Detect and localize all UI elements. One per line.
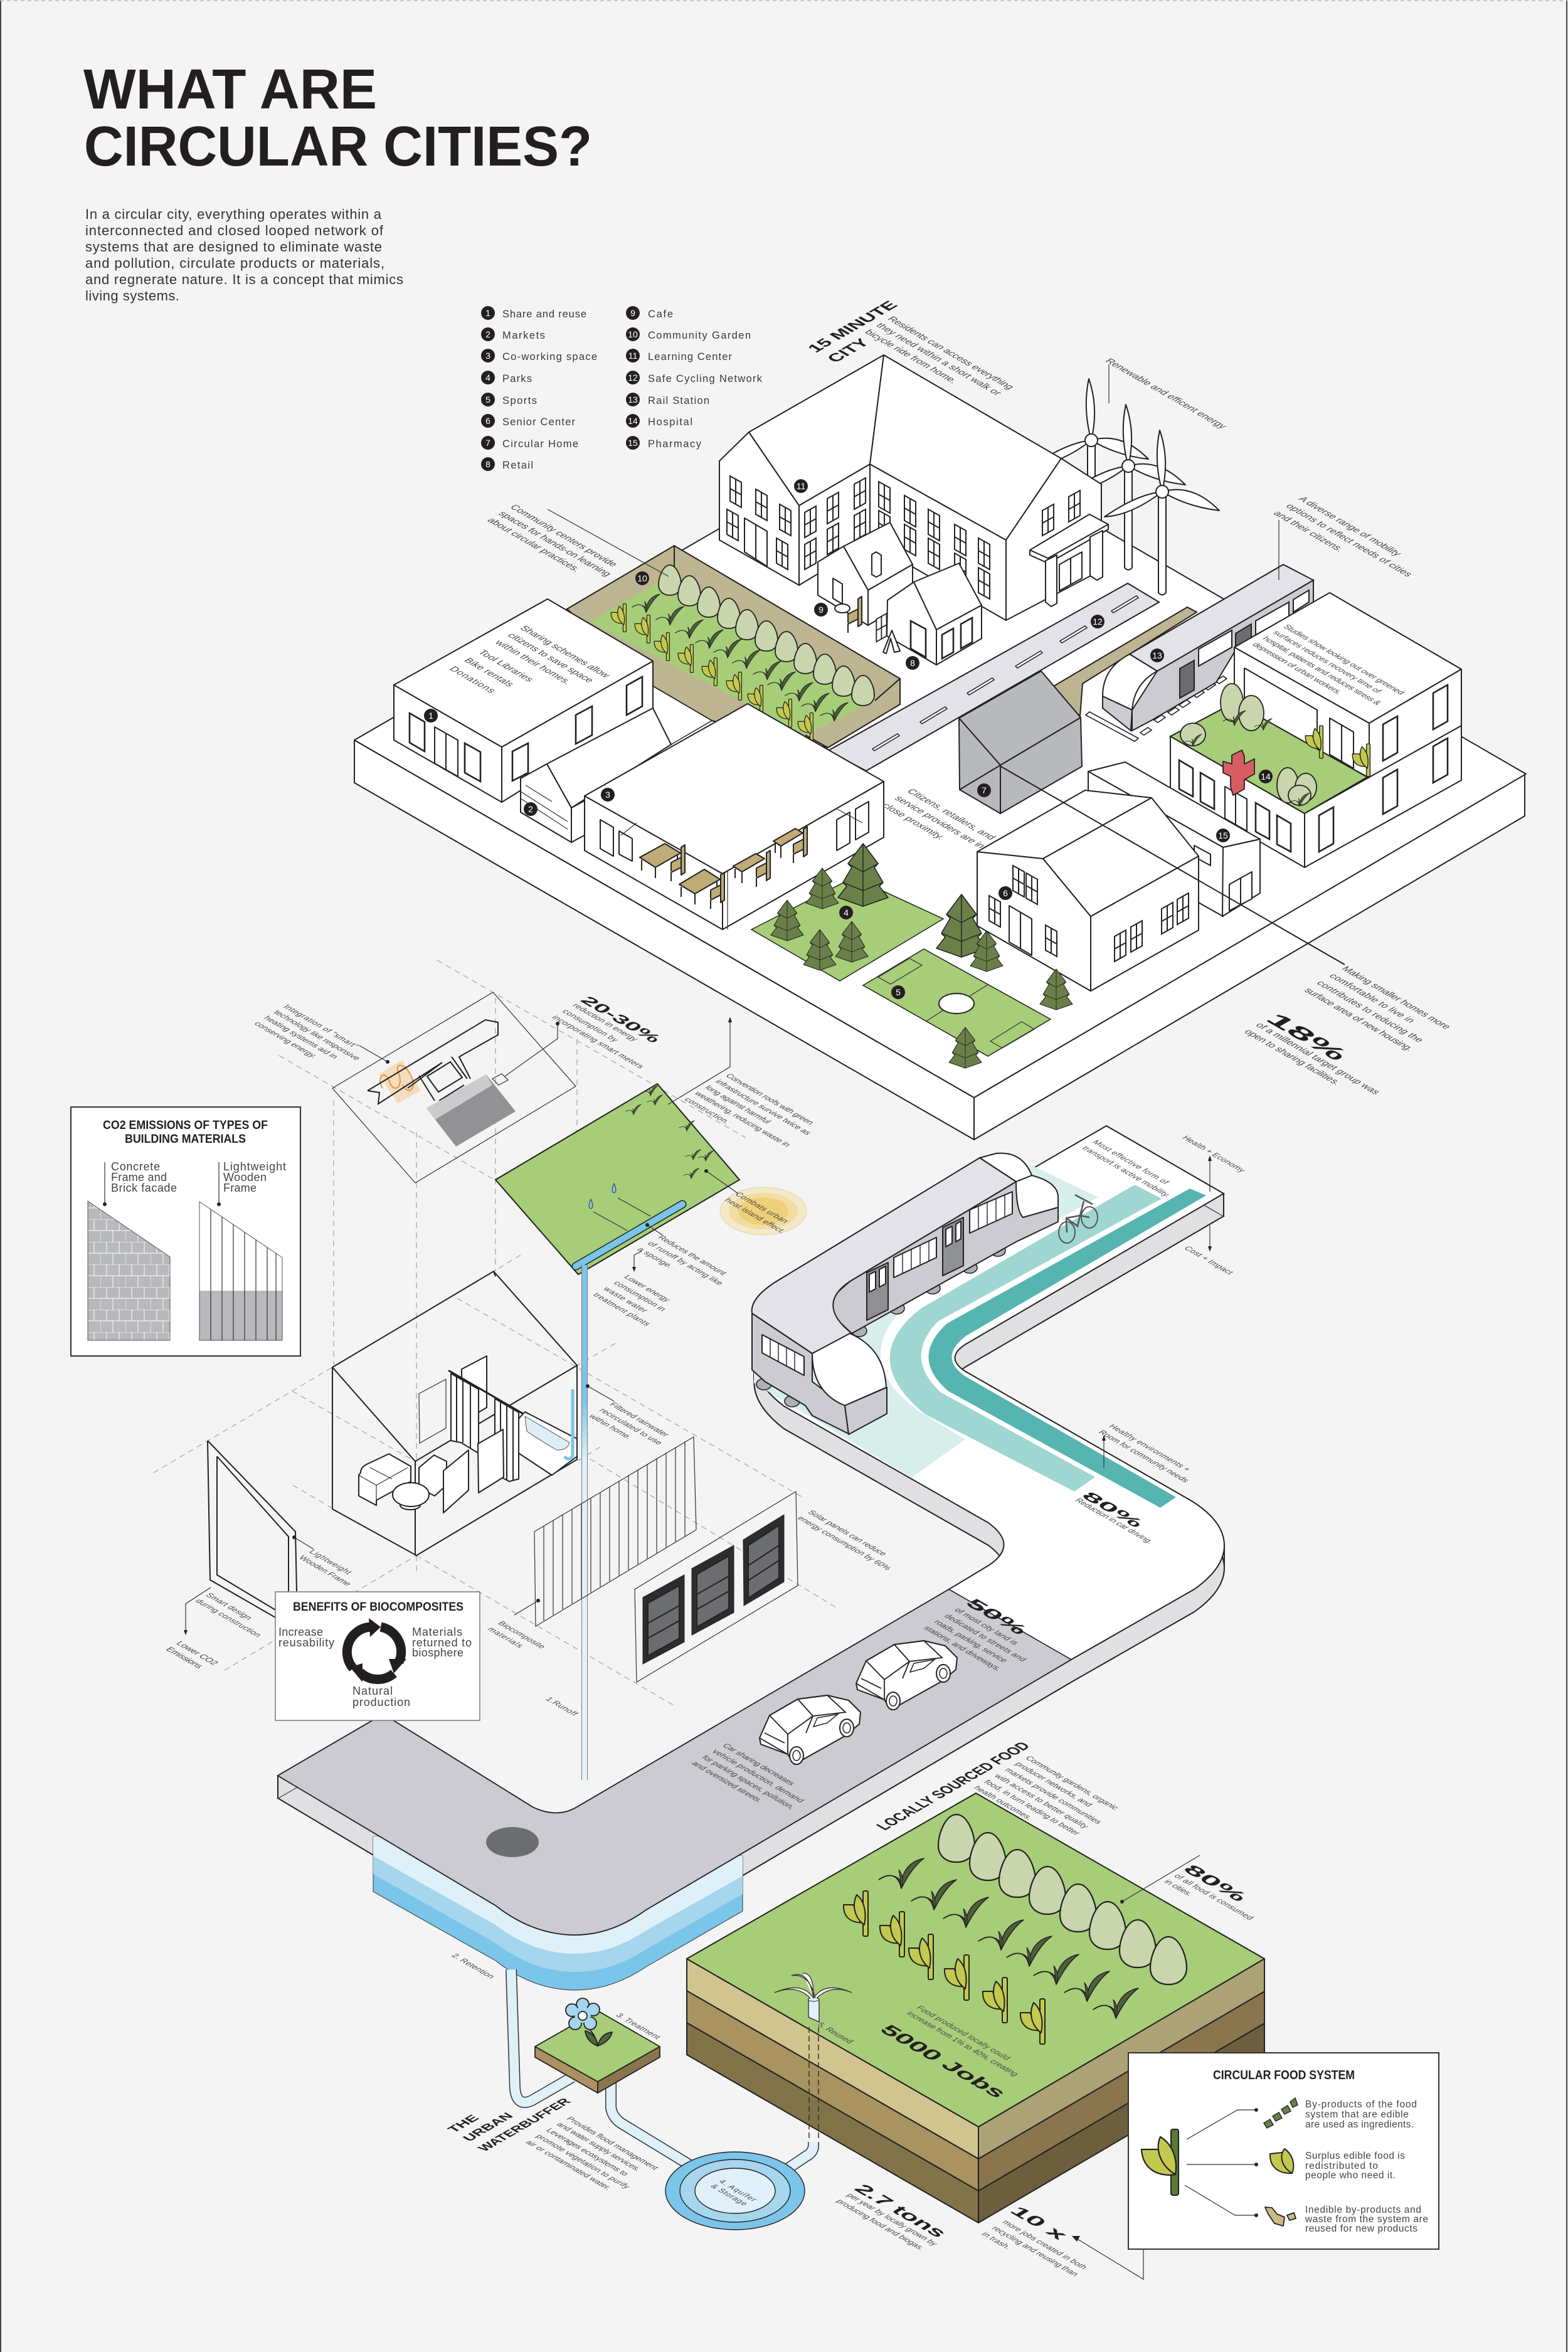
transport ribbon surface xyxy=(278,1126,1224,1935)
note: community gardens: markets provide communities xyxy=(1003,1766,1104,1825)
label: treatment: 3. Treatment xyxy=(614,2011,664,2040)
note: green surfaces study: hospital, patients and reduces stress & xyxy=(1261,635,1384,706)
legend: numbered places: Rail Station xyxy=(648,395,709,406)
note: urban waterbuffer: Provides flood management xyxy=(564,2115,661,2171)
stat: 80 percent car driving: Reduction in car driving. xyxy=(1073,1496,1156,1545)
legend: numbered places: Community Garden xyxy=(648,330,751,341)
icon: cars xyxy=(760,1641,957,1764)
stat: 2.7 tons xyxy=(834,2181,951,2253)
stat: 50 percent city land: stations, and driveways. xyxy=(921,1624,1004,1672)
legend: numbered places: Cafe xyxy=(648,309,673,320)
map number markers: 1 xyxy=(428,711,433,721)
leader line through building 6 xyxy=(1000,766,1345,965)
panel: circular food system xyxy=(1128,2053,1439,2249)
note: community centers: Community centers provide xyxy=(507,503,620,568)
field hedge xyxy=(938,1814,1187,1984)
stat: 80 percent of food: of all food is consumed xyxy=(1172,1872,1256,1921)
note: filtered rainwater: Filtered rainwater xyxy=(608,1401,672,1438)
stat: 18 percent: open to sharing facilities. xyxy=(1242,1028,1343,1087)
stat: 50 percent city land: dedicated to streets and xyxy=(942,1613,1029,1663)
note: health and economy arrows: Cost + Impact xyxy=(1182,1244,1236,1276)
legend: numbered places: Retail xyxy=(502,460,533,471)
wood label: Wooden xyxy=(223,1171,267,1184)
wind turbines xyxy=(1034,379,1219,595)
intro text block: systems that are designed to eliminate waste xyxy=(85,239,382,255)
note: combats heat: heat island effect. xyxy=(723,1197,788,1235)
rain downpipe xyxy=(585,1265,614,1780)
text: inedible by-products: Inedible by-products and xyxy=(1305,2205,1421,2215)
concrete label: Concrete xyxy=(111,1160,160,1173)
text: natural production xyxy=(352,1685,410,1708)
connector lines xyxy=(1185,2108,1258,2217)
icon: bicycle xyxy=(1059,1195,1098,1243)
map number markers: 7 xyxy=(982,785,987,795)
text: by-products: By-products of the food xyxy=(1305,2099,1417,2110)
note: lower emissions: Lower CO2 xyxy=(174,1640,221,1666)
note: green surfaces study xyxy=(1250,623,1407,714)
building 2: market xyxy=(521,708,671,842)
heading: 15 minute city: CITY xyxy=(824,336,874,365)
note: residents: they need within a short walk or xyxy=(874,322,1004,397)
text: increase reusability: Increase xyxy=(278,1626,323,1638)
note: green surfaces study: depression of urban workers. xyxy=(1250,641,1345,696)
note: smaller homes xyxy=(1301,965,1454,1052)
intro text block: and pollution, circulate products or materials, xyxy=(85,255,384,271)
note: residents: bicycle ride from home. xyxy=(862,328,960,385)
label: aquifer and storage: 4. Aquifer xyxy=(717,2178,759,2203)
icon: by-products xyxy=(1264,2098,1298,2128)
reused water fountain xyxy=(775,1973,852,2139)
smart energy plane xyxy=(332,992,576,1183)
note: filtered rainwater xyxy=(586,1401,675,1452)
text: surplus food: Surplus edible food is xyxy=(1305,2151,1405,2161)
stat: 50 percent city land: roads, parking, service xyxy=(932,1618,1010,1664)
heading: benefits: BENEFITS OF BIOCOMPOSITES xyxy=(293,1601,464,1614)
legend: numbered places: 1 xyxy=(485,308,490,318)
brick wall swatch xyxy=(88,1201,170,1340)
icon: surplus leaf xyxy=(1270,2149,1293,2173)
note: sharing schemes: citizens to save space xyxy=(505,632,596,684)
note: lower emissions xyxy=(164,1640,221,1673)
note: smaller homes: comfortable to live in xyxy=(1327,972,1417,1025)
heading: the urban waterbuffer: URBAN xyxy=(460,2111,517,2144)
text: materials returned: Materials xyxy=(412,1626,462,1638)
note: sharing schemes: Donations xyxy=(447,665,498,695)
note: residents: Residents can access everything xyxy=(885,315,1016,391)
building 13: rail station train xyxy=(1103,564,1313,731)
map number markers: 8 xyxy=(910,658,915,668)
legend: numbered places: Hospital xyxy=(648,416,692,428)
legend: numbered places: Learning Center xyxy=(648,351,733,363)
note: sharing schemes: Tool Libraries xyxy=(475,649,536,684)
legend: numbered places xyxy=(481,306,763,471)
text: natural production: production xyxy=(352,1696,410,1708)
stat: 20-30 percent: 20-30% xyxy=(576,993,665,1046)
pipes: retention to treatment and aquifer xyxy=(511,1969,813,2173)
heading: 15 minute city xyxy=(804,299,920,366)
note: filtered rainwater: within home. xyxy=(586,1412,635,1441)
note: lower emissions: Emissions xyxy=(164,1645,206,1670)
map number markers: 10 xyxy=(637,573,647,583)
note: community centers: about circular practices. xyxy=(485,516,583,573)
note: lightweight frame: Wooden Frame xyxy=(297,1554,354,1587)
building 7: circular home xyxy=(959,671,1082,813)
heading: CO2 emissions xyxy=(103,1119,268,1146)
legend: numbered places: Co-working space xyxy=(502,351,597,363)
legend: numbered places: Parks xyxy=(502,373,532,384)
stat: 10 x: more jobs created in both xyxy=(1000,2218,1089,2270)
concrete label: Frame and xyxy=(111,1171,167,1184)
text: increase reusability xyxy=(278,1626,334,1649)
note: smart technology xyxy=(252,1003,373,1073)
icon: plant xyxy=(1142,2129,1179,2195)
text: by-products: are used as ingredients. xyxy=(1305,2119,1414,2130)
note: mobility: options to reflect needs of cities xyxy=(1283,502,1415,578)
community garden crops xyxy=(611,594,848,741)
label: retention: 2. Retention xyxy=(450,1952,497,1980)
stat: 10 x: recycling and reusing than xyxy=(990,2225,1081,2277)
note: lightweight frame: Lightweight xyxy=(307,1548,354,1576)
note: smart technology: technology like responsive xyxy=(272,1009,363,1062)
concrete label: Brick facade xyxy=(111,1182,177,1194)
note: food produced locally: increase from 1% to 40%, creating xyxy=(904,2010,1021,2077)
note: urban waterbuffer: and water supply services. xyxy=(554,2121,644,2173)
map number markers: 9 xyxy=(818,605,824,615)
panel: benefits of biocomposites xyxy=(275,1592,480,1720)
stat: 18 percent: 18% xyxy=(1260,1009,1355,1064)
construction guide lines xyxy=(154,960,839,1706)
stat: 2.7 tons: producing food and biogas. xyxy=(834,2198,927,2252)
legend: numbered places: 10 xyxy=(628,329,638,339)
stat: 20-30 percent: reduction in energy xyxy=(571,1002,641,1042)
text: by-products: system that are edible xyxy=(1305,2109,1409,2120)
note: conventional roofs xyxy=(682,1072,824,1154)
stat: 50 percent city land: of most city land is xyxy=(953,1606,1021,1646)
note: active mobility: transport is active mobility. xyxy=(1080,1145,1173,1199)
heading: CO2 emissions: CO2 EMISSIONS OF TYPES OF xyxy=(103,1119,268,1132)
text: surplus food: redistributed to xyxy=(1305,2161,1378,2171)
stat: 2.7 tons: 2.7 tons xyxy=(850,2181,951,2240)
note: healthy environments: Healthy environments + xyxy=(1107,1422,1193,1473)
legend: numbered places: 15 xyxy=(628,438,638,448)
note: green surfaces study: surfaces reduces recovery time of xyxy=(1271,629,1384,694)
stat: 10 x: 10 x xyxy=(1005,2203,1073,2242)
intro text block xyxy=(85,206,403,304)
urban heat circle xyxy=(704,1169,807,1235)
text: materials returned: biosphere xyxy=(412,1646,464,1659)
note: community centers: spaces for hands-on learning xyxy=(496,510,614,578)
intro text block: interconnected and closed looped network of xyxy=(85,223,384,238)
note: conventional roofs: infrastructure survive twice as xyxy=(713,1078,814,1136)
transit lanes xyxy=(754,1165,1206,1508)
note: smart technology: Integration of "smart" xyxy=(282,1003,361,1049)
note: solar energy: Solar panels can reduce xyxy=(806,1508,889,1557)
park 4 xyxy=(751,844,943,981)
text: materials returned: returned to xyxy=(412,1636,472,1649)
map number markers: 14 xyxy=(1261,771,1271,781)
note: lower energy: treatment plants xyxy=(591,1291,653,1327)
note: community gardens: Community gardens, organic xyxy=(1024,1754,1121,1811)
note: healthy environments: Room for community needs xyxy=(1096,1429,1192,1484)
legend: numbered places: 2 xyxy=(485,329,490,339)
text: increase reusability: reusability xyxy=(278,1636,334,1649)
stat: 20-30 percent xyxy=(550,993,667,1070)
note: lower energy: waste water xyxy=(601,1285,650,1314)
legend: numbered places: Sports xyxy=(502,395,537,406)
green roof plane xyxy=(495,1017,739,1274)
note: smart design: during construction xyxy=(193,1597,264,1638)
stat: 18 percent: of a millennial target group was xyxy=(1253,1021,1382,1096)
legend: numbered places: Senior Center xyxy=(502,416,576,428)
water retention layers xyxy=(373,1836,743,1990)
biocomposite panel xyxy=(514,1437,696,1626)
lightweight wooden frame xyxy=(184,1441,314,1635)
note: smart technology: conserving energy. xyxy=(252,1020,320,1059)
text: surplus food: people who need it. xyxy=(1305,2170,1396,2181)
note: community gardens: health outcomes. xyxy=(972,1784,1036,1821)
note: lower energy: consumption in xyxy=(612,1279,669,1313)
label: aquifer and storage: & Storage xyxy=(709,2183,750,2207)
note: community gardens: producer networks, and xyxy=(1013,1761,1095,1808)
aquifer xyxy=(665,2152,805,2230)
building 1: share and reuse xyxy=(394,599,653,802)
note: smart technology: heating systems aid in xyxy=(262,1014,341,1060)
label: reused: 5. Reused xyxy=(815,2021,856,2045)
legend: numbered places: Markets xyxy=(502,330,545,341)
legend: numbered places: 8 xyxy=(485,459,490,469)
legend: numbered places: 11 xyxy=(628,351,637,361)
note: urban waterbuffer: air or contaminated water. xyxy=(524,2139,614,2191)
legend: numbered places: 13 xyxy=(628,395,638,405)
stat: 2.7 tons: per year by locally grown by xyxy=(845,2191,940,2247)
stat: 80 percent of food xyxy=(1120,1855,1256,1927)
treatment block xyxy=(535,1998,660,2093)
heading: the urban waterbuffer xyxy=(444,2078,575,2154)
stat: 50 percent city land: 50% xyxy=(961,1596,1033,1638)
intro text block: In a circular city, everything operates within a xyxy=(85,206,382,222)
map number markers: 4 xyxy=(844,908,849,918)
icon: cycle arrows xyxy=(347,1618,406,1682)
legend: numbered places: 7 xyxy=(485,438,490,448)
note: conventional roofs: construction. xyxy=(682,1096,733,1125)
note: citizens retailers: Citizens, retailers, and xyxy=(904,787,998,842)
note: conventional roofs: Convention roofs with green xyxy=(724,1072,817,1126)
food field block xyxy=(687,1793,1264,2223)
map number markers: 3 xyxy=(605,790,610,800)
title xyxy=(83,58,592,178)
note: community gardens xyxy=(971,1754,1125,1843)
note: health and economy arrows xyxy=(1180,1134,1248,1276)
legend: numbered places: 12 xyxy=(628,373,638,383)
note: smaller homes: surface area of new housing. xyxy=(1301,987,1416,1053)
heading: locally sourced food: LOCALLY SOURCED FOOD xyxy=(872,1739,1034,1833)
stat: 10 x: in trash. xyxy=(980,2230,1014,2250)
note: car sharing: vehicle production, demand xyxy=(710,1748,807,1804)
note: biocomposite materials xyxy=(485,1619,548,1656)
note: community gardens: food, in turn leading to better xyxy=(982,1778,1083,1836)
building 14: hospital xyxy=(1170,593,1461,867)
map number markers: 5 xyxy=(896,987,901,997)
panel: CO2 emissions xyxy=(71,1107,300,1356)
heading: the urban waterbuffer: THE xyxy=(445,2113,482,2135)
legend: numbered places: 6 xyxy=(485,416,490,426)
map number markers: 6 xyxy=(1003,888,1008,898)
note: filtered rainwater: recirculated to use xyxy=(597,1407,665,1446)
wood label: Frame xyxy=(223,1182,257,1194)
map number markers: 2 xyxy=(528,804,533,814)
stat: 80 percent of food: in cities. xyxy=(1162,1878,1195,1897)
note: biocomposite materials: materials xyxy=(485,1626,526,1649)
legend: numbered places: 3 xyxy=(485,351,490,361)
note: car sharing xyxy=(689,1742,818,1816)
solar panels xyxy=(635,1491,798,1682)
map number markers: 13 xyxy=(1152,650,1162,660)
text: materials returned xyxy=(412,1626,472,1659)
note: urban waterbuffer: Leverages ecosystems to xyxy=(544,2127,631,2177)
heading: CO2 emissions: BUILDING MATERIALS xyxy=(125,1133,246,1146)
note: food produced locally xyxy=(875,2004,1031,2101)
sports field 5 xyxy=(863,949,1051,1056)
note: citizens retailers: close proximity. xyxy=(879,802,947,841)
building 11: learning center xyxy=(719,355,1108,620)
note: sharing schemes: Sharing schemes allow xyxy=(517,624,613,679)
wood label: Lightweight xyxy=(223,1160,286,1173)
note: urban waterbuffer xyxy=(524,2115,664,2196)
note: renewable energy: Renewable and efficent energy xyxy=(1103,357,1229,430)
stat: 20-30 percent: consumption by xyxy=(560,1008,622,1043)
stat: 80 percent of food: 80% xyxy=(1179,1862,1253,1904)
note: urban waterbuffer: promote vegetation to purify xyxy=(534,2132,633,2190)
car road surface xyxy=(278,1589,1071,1935)
note: community gardens: with access to better quality xyxy=(992,1772,1091,1830)
community garden hedge xyxy=(659,565,874,706)
building 3: co-working space xyxy=(585,704,884,930)
note: reduces runoff: Reduces the amount xyxy=(656,1234,729,1276)
note: community centers xyxy=(485,503,669,585)
legend: numbered places: 5 xyxy=(485,395,490,405)
note: health and economy arrows: Health + Economy xyxy=(1180,1134,1248,1173)
building 8: retail xyxy=(883,563,982,665)
note: conventional roofs: weathering, reducing waste in xyxy=(692,1089,793,1148)
intro text block: and regnerate nature. It is a concept that mimics xyxy=(85,272,403,287)
legend: numbered places: 4 xyxy=(485,373,490,383)
note: food produced locally: 5000 Jobs xyxy=(875,2022,1011,2101)
note: reduces runoff: a sponge. xyxy=(635,1246,676,1269)
text: natural production: Natural xyxy=(352,1685,393,1697)
note: reduces runoff xyxy=(635,1234,736,1292)
note: sharing schemes: within their homes. xyxy=(492,638,574,686)
wood label xyxy=(217,1160,286,1206)
note: lower energy: Lower energy xyxy=(622,1273,673,1303)
road 12 xyxy=(828,583,1159,771)
note: car sharing: Car sharing decreases xyxy=(721,1742,798,1787)
label: runoff: 1.Runoff xyxy=(544,1695,581,1717)
note: sharing schemes xyxy=(446,624,613,720)
note: citizens retailers xyxy=(879,787,1000,857)
legend: numbered places: Circular Home xyxy=(502,438,578,450)
text: inedible by-products xyxy=(1305,2205,1428,2234)
legend: numbered places: 9 xyxy=(630,308,635,318)
heading: the urban waterbuffer: WATERBUFFER xyxy=(475,2096,575,2154)
text: inedible by-products: waste from the system are xyxy=(1305,2214,1428,2225)
map number markers: 11 xyxy=(797,481,805,491)
building 10: community garden walls xyxy=(567,546,900,748)
note: mobility: A diverse range of mobility xyxy=(1296,495,1404,558)
note: green surfaces study: Studies show looking out over greened xyxy=(1281,623,1407,696)
note: food produced locally: Food produced locally could xyxy=(914,2004,1013,2062)
note: combats heat: Combats urban xyxy=(733,1190,791,1224)
icon: waste xyxy=(1265,2207,1296,2226)
wood wall swatch xyxy=(199,1202,282,1340)
note: car sharing: and oversized streets. xyxy=(689,1760,765,1804)
map number markers xyxy=(424,479,1273,999)
title: CIRCULAR CITIES? xyxy=(84,115,592,178)
concrete label xyxy=(103,1160,177,1206)
note: biocomposite materials: Biocomposite xyxy=(496,1619,548,1650)
field crops xyxy=(844,1858,1138,2044)
note: sharing schemes: Bike rentals xyxy=(462,657,516,689)
legend: numbered places: Share and reuse xyxy=(502,309,586,320)
text: inedible by-products: reused for new products xyxy=(1305,2223,1417,2234)
house cutaway xyxy=(332,1271,577,1555)
note: citizens retailers: service providers are in xyxy=(892,795,987,850)
map number markers: 12 xyxy=(1093,617,1103,627)
note: active mobility: Most effective form of xyxy=(1091,1138,1172,1185)
note: conventional roofs: long against harmful xyxy=(703,1084,773,1125)
legend: numbered places: 14 xyxy=(628,416,638,426)
building 15: pharmacy xyxy=(1088,762,1260,916)
note: car sharing: for parking spaces, pollution, xyxy=(700,1754,798,1811)
stat: 20-30 percent: incorporating smart meters xyxy=(550,1014,647,1070)
note: lower energy xyxy=(590,1273,684,1327)
stat: 10 x xyxy=(980,2203,1091,2283)
note: solar energy: energy consumption by 60% xyxy=(795,1515,894,1572)
stat: 80 percent car driving: 80% xyxy=(1078,1489,1148,1530)
note: smart design: Smart design xyxy=(204,1591,255,1621)
heading: 15 minute city: 15 MINUTE xyxy=(804,299,901,355)
arrow from food system to 10x xyxy=(1072,2236,1143,2279)
heading: circular food system: CIRCULAR FOOD SYSTEM xyxy=(1213,2069,1355,2082)
note: smaller homes: Making smaller homes more xyxy=(1339,965,1453,1031)
building 9: cafe xyxy=(818,522,913,642)
note: mobility: and their citizens. xyxy=(1271,509,1346,553)
note: smaller homes: contributes to reducing the xyxy=(1314,979,1426,1044)
building 6: senior center xyxy=(977,790,1199,991)
rail ties xyxy=(1086,676,1227,741)
note: reduces runoff: of runoff by acting like xyxy=(645,1240,726,1286)
rail embankment xyxy=(1054,607,1197,716)
train xyxy=(752,1153,1058,1434)
title: WHAT ARE xyxy=(83,58,377,121)
trees around senior center xyxy=(936,894,1073,1068)
legend: numbered places: Safe Cycling Network xyxy=(648,373,763,384)
stat: 50 percent city land xyxy=(921,1596,1039,1675)
city platform xyxy=(354,418,1526,1140)
text: surplus food xyxy=(1305,2151,1405,2181)
transport ribbon side xyxy=(278,1148,1224,1957)
legend: numbered places: Pharmacy xyxy=(648,438,702,450)
map number markers: 15 xyxy=(1218,830,1228,840)
intro text block: living systems. xyxy=(85,288,179,304)
text: by-products xyxy=(1305,2099,1417,2130)
